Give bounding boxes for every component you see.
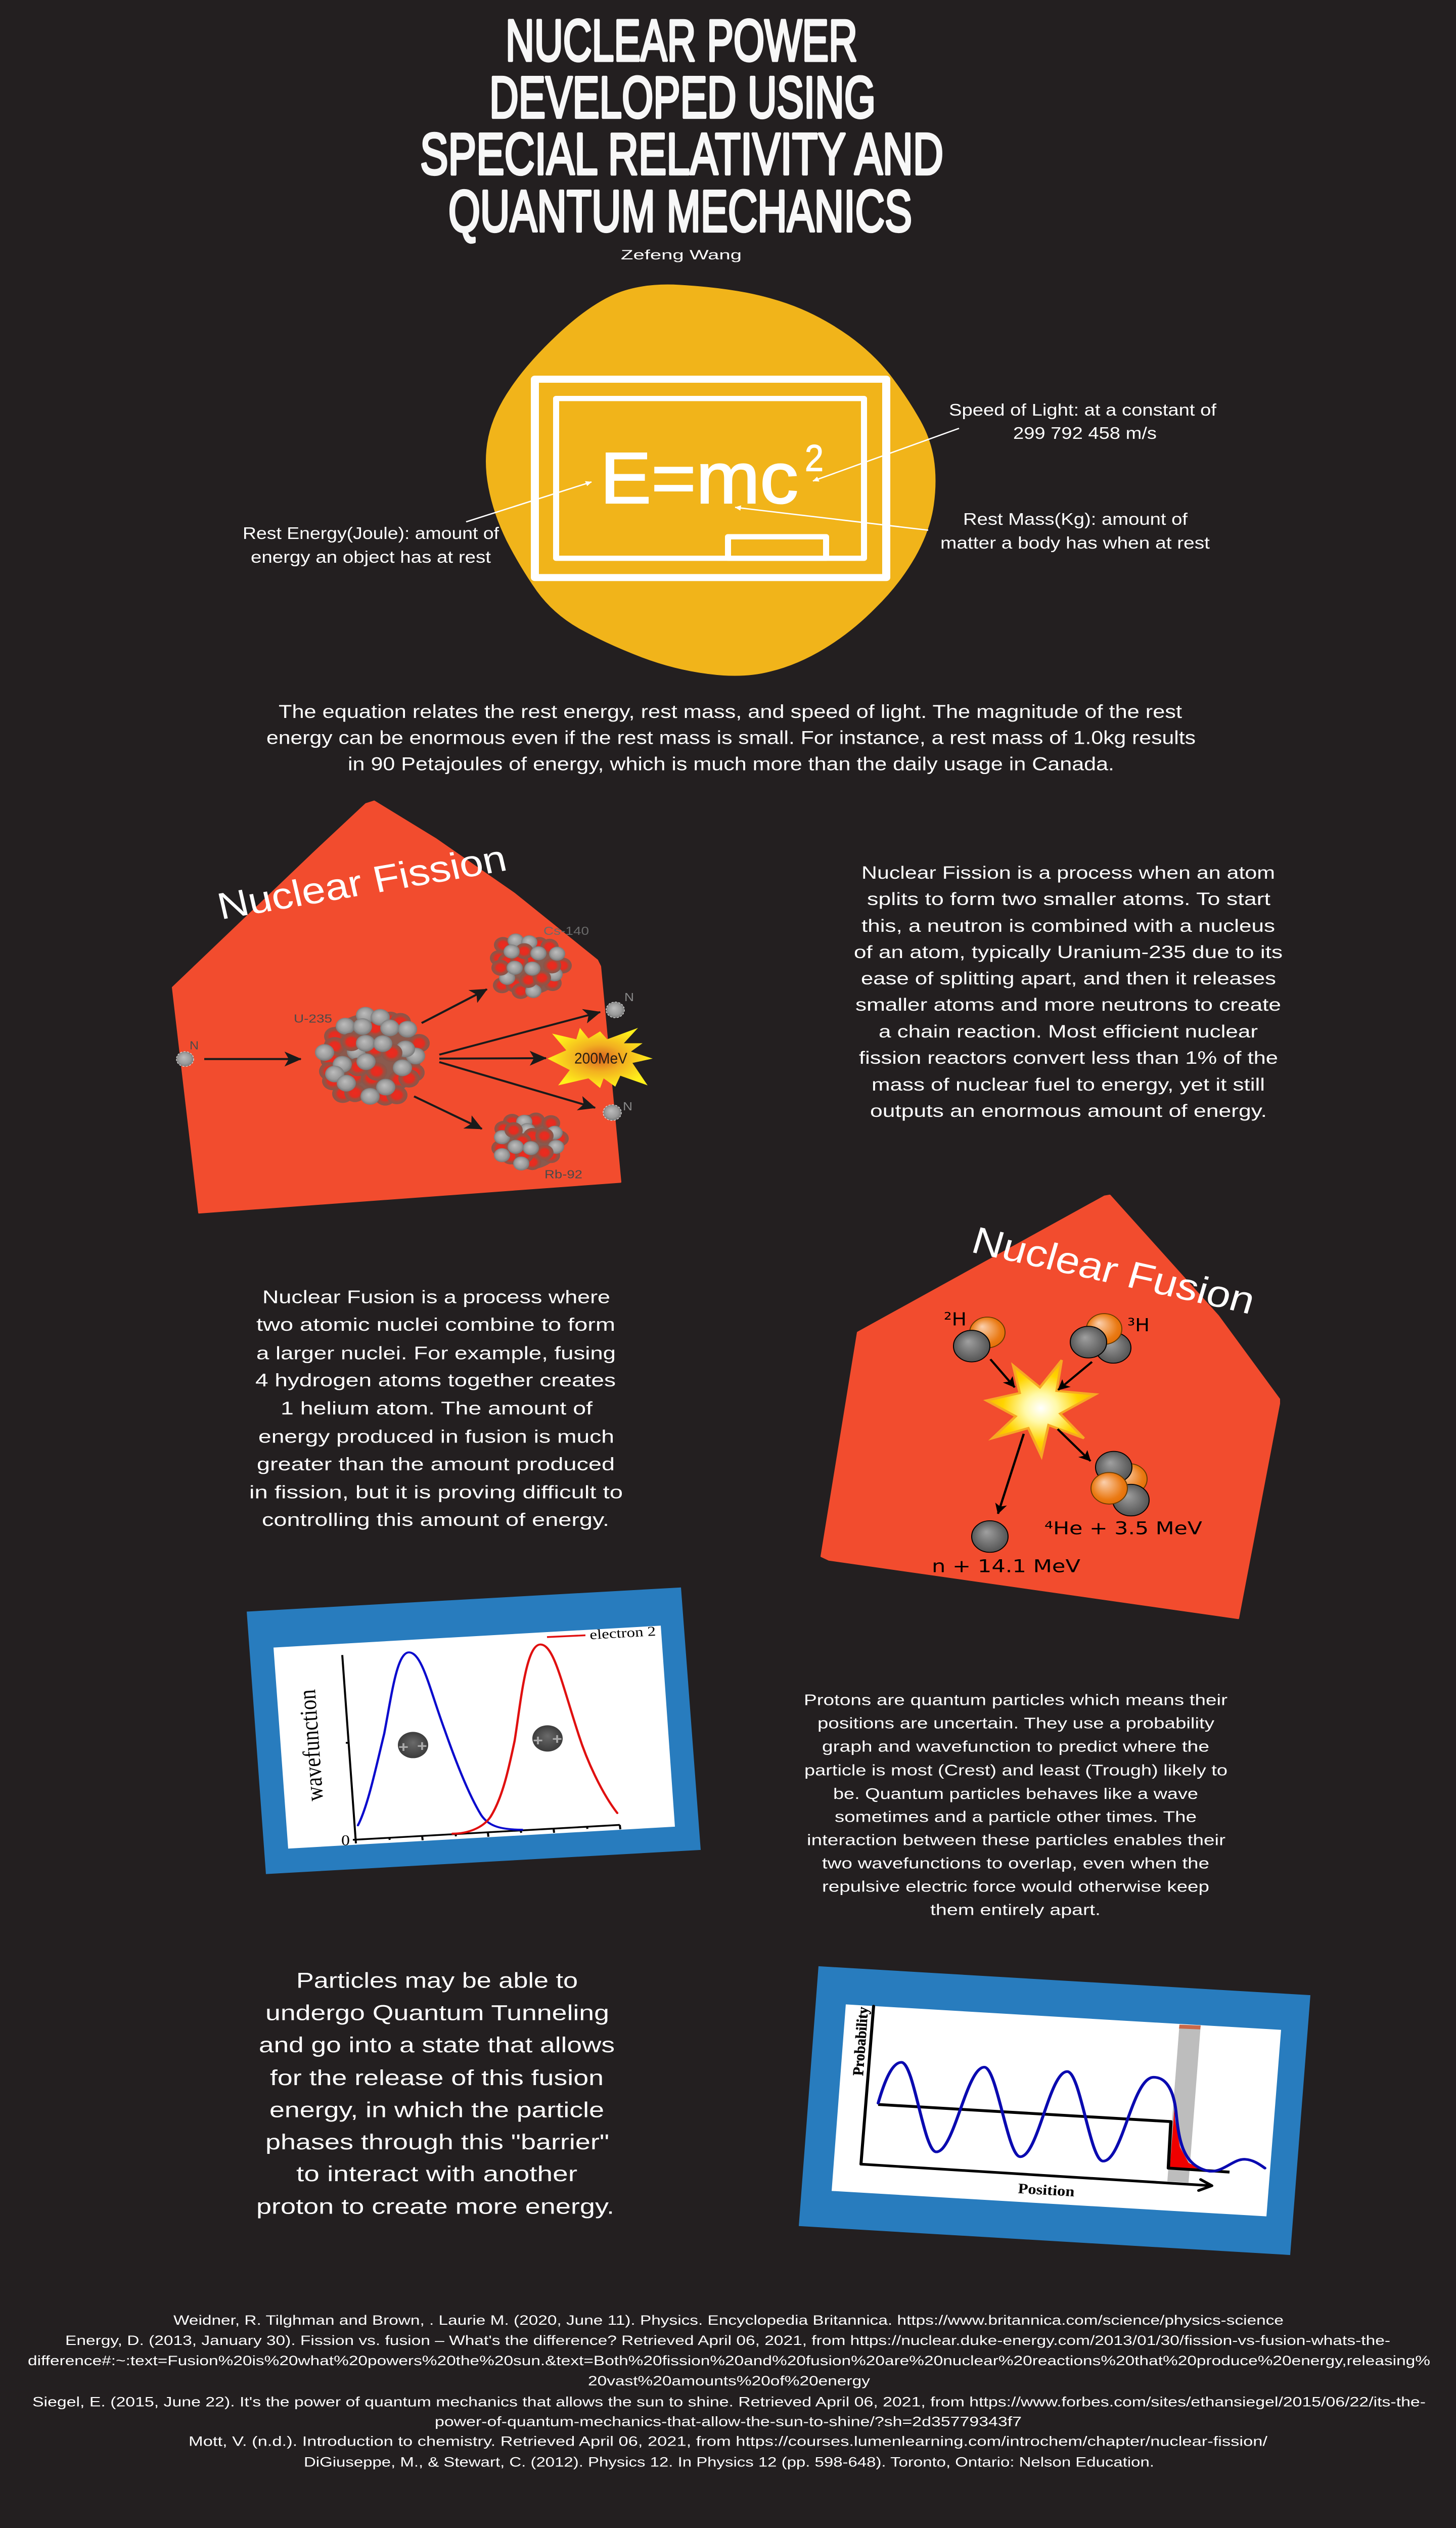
- neutrons: [176, 1002, 624, 1120]
- title: DEVELOPED USING: [489, 64, 876, 130]
- labels: particles: N: [623, 1100, 632, 1113]
- icon: proton 2: [532, 1725, 563, 1751]
- text block: quantum particles: graph and wavefunction to predict where the: [822, 1738, 1209, 1755]
- diagram: neutron: [972, 1521, 1008, 1552]
- title: QUANTUM MECHANICS: [448, 178, 912, 244]
- text block: nuclear fusion: greater than the amount produced: [257, 1454, 615, 1474]
- text block: nuclear fission: of an atom, typically Uranium-235 due to its: [854, 942, 1283, 962]
- red pentagon background: [822, 1196, 1279, 1618]
- axis label: wavefunction: wavefunction: [293, 1689, 329, 1802]
- text block: equation explanation: The equation relates the rest energy, rest mass, and speed of light. The magnitude of the rest: [279, 701, 1182, 722]
- text block: nuclear fission: [854, 863, 1283, 1121]
- red pentagon background: [173, 801, 620, 1212]
- label: speed of light: [949, 400, 1216, 442]
- text block: quantum particles: two wavefunctions to overlap, even when the: [822, 1855, 1209, 1872]
- axis label: probability: Probability: [850, 2006, 872, 2076]
- label: rest energy: Rest Energy(Joule): amount of: [243, 524, 499, 543]
- barrier: [1167, 2024, 1201, 2183]
- references: Energy, D. (2013, January 30). Fission vs. fusion – What's the difference? Retrieved April 06, 2021, from https://nuclear.duke-energy.com/2013/01/30/fission-vs-fusion-whats-the-: [65, 2333, 1390, 2349]
- label: speed of light: Speed of Light: at a constant of: [949, 400, 1216, 419]
- title: SPECIAL RELATIVITY AND: [420, 121, 943, 187]
- labels: particles: Cs-140: [543, 925, 589, 938]
- arrows: fusion reaction: [990, 1359, 1092, 1514]
- diagram: Cs-140 nucleus: [490, 933, 572, 999]
- text block: quantum particles: particle is most (Crest) and least (Trough) likely to: [804, 1761, 1227, 1779]
- labels: particles: N: [190, 1039, 199, 1052]
- icon: proton 1: +: [417, 1738, 427, 1754]
- text block: nuclear fusion: a larger nuclei. For example, fusing: [256, 1343, 616, 1364]
- icon: energy burst 200MeV: 200MeV: [574, 1049, 627, 1067]
- text block: quantum particles: sometimes and a particle other times. The: [835, 1808, 1197, 1825]
- text block: nuclear fission: outputs an enormous amount of energy.: [870, 1101, 1267, 1121]
- references: DiGiuseppe, M., & Stewart, C. (2012). Physics 12. In Physics 12 (pp. 598-648). Toronto, Ontario: Nelson Education.: [304, 2455, 1154, 2470]
- text block: nuclear fusion: in fission, but it is proving difficult to: [249, 1482, 623, 1503]
- diagram: energy star: [986, 1360, 1096, 1456]
- text block: quantum tunneling: Particles may be able to: [296, 1968, 578, 1993]
- references: difference#:~:text=Fusion%20is%20what%20powers%20the%20sun.&text=Both%20fission%20and%20fusion%20are%20nuclear%20reactions%20that%20produce%20energy,releasing%: [28, 2354, 1430, 2368]
- labels: fusion particles: ³H: [1127, 1315, 1150, 1336]
- label: rest mass: [940, 510, 1210, 552]
- arrow: speed of light: [813, 428, 959, 481]
- labels: particles: N: [624, 991, 634, 1004]
- references: Siegel, E. (2015, June 22). It's the power of quantum mechanics that allows the sun to shine. Retrieved April 06, 2021, from https://www.forbes.com/sites/ethansiegel/2015/06/22/its-the-: [32, 2395, 1426, 2410]
- legend: electron 2: [547, 1624, 656, 1643]
- references: power-of-quantum-mechanics-that-allow-the-sun-to-shine/?sh=2d35779343f7: [435, 2414, 1022, 2429]
- legend: electron 2: electron 2: [589, 1624, 656, 1643]
- text block: nuclear fusion: two atomic nuclei combine to form: [256, 1314, 615, 1335]
- text block: quantum particles: them entirely apart.: [930, 1901, 1101, 1918]
- blue frame: [799, 1966, 1310, 2255]
- diagram: Rb-92 nucleus: [491, 1113, 569, 1170]
- text block: quantum tunneling: and go into a state that allows: [259, 2033, 615, 2057]
- icon: chalkboard: [535, 379, 886, 577]
- labels: fusion particles: [932, 1309, 1202, 1576]
- panel: nuclear fission: [173, 801, 653, 1212]
- panel: wavefunction chart: [247, 1588, 701, 1874]
- text block: quantum particles: repulsive electric force would otherwise keep: [822, 1878, 1209, 1895]
- text block: nuclear fission: ease of splitting apart, and then it releases: [861, 969, 1276, 988]
- blue frame: [247, 1588, 701, 1874]
- text block: nuclear fusion: 1 helium atom. The amount of: [281, 1398, 593, 1419]
- panel: tunneling chart: [799, 1966, 1310, 2255]
- diagram: tritium: [1070, 1314, 1131, 1363]
- text block: equation explanation: [266, 701, 1196, 775]
- text block: quantum tunneling: [256, 1968, 615, 2219]
- panel: nuclear fusion: [822, 1196, 1279, 1618]
- text block: quantum particles: be. Quantum particles behaves like a wave: [833, 1785, 1198, 1802]
- diagram: helium: [1091, 1452, 1149, 1516]
- label: rest energy: energy an object has at rest: [251, 548, 491, 566]
- label: speed of light: 299 792 458 m/s: [1013, 424, 1157, 442]
- text block: equation explanation: energy can be enormous even if the rest mass is small. For instance, a rest mass of 1.0kg results: [266, 727, 1196, 748]
- text block: quantum particles: interaction between these particles enables their: [807, 1831, 1225, 1848]
- yellow blob: [486, 285, 935, 676]
- icon: proton 1: +: [398, 1738, 408, 1755]
- labels: particles: Rb-92: [544, 1168, 582, 1181]
- text block: quantum tunneling: to interact with another: [296, 2161, 577, 2186]
- diagram: deuterium: [953, 1317, 1005, 1362]
- text block: nuclear fission: a chain reaction. Most efficient nuclear: [879, 1022, 1258, 1042]
- icon: proton 2: +: [533, 1732, 543, 1749]
- text block: quantum tunneling: energy, in which the particle: [269, 2098, 604, 2122]
- icon: proton 2: +: [552, 1731, 562, 1747]
- curve: probability wave: [878, 2062, 1265, 2171]
- tunneling red area: [1170, 2108, 1202, 2170]
- arrow: rest mass: [735, 507, 928, 530]
- text block: nuclear fission: Nuclear Fission is a process when an atom: [861, 863, 1275, 883]
- text block: nuclear fission: mass of nuclear fuel to energy, yet it still: [872, 1075, 1265, 1095]
- equation E=mc2: E=mc: [600, 437, 798, 518]
- curve: electron 2 wavefunction: [452, 1645, 617, 1834]
- labels: fusion particles: ⁴He + 3.5 MeV: [1044, 1518, 1202, 1539]
- text block: nuclear fission: splits to form two smaller atoms. To start: [867, 889, 1270, 909]
- arrows: reaction paths: [204, 989, 600, 1129]
- title: [420, 7, 943, 244]
- references: Mott, V. (n.d.). Introduction to chemistry. Retrieved April 06, 2021, from https://courses.lumenlearning.com/introchem/chapter/nuclear-fission/: [189, 2434, 1268, 2449]
- potential barrier line: [878, 2104, 1230, 2172]
- references: Weidner, R. Tilghman and Brown, . Laurie M. (2020, June 11). Physics. Encyclopedia Britannica. https://www.britannica.com/science/physics-science: [173, 2313, 1284, 2328]
- text block: nuclear fusion: 4 hydrogen atoms together creates: [255, 1370, 616, 1391]
- diagram: U-235 nucleus: [315, 1007, 430, 1106]
- labels: fusion particles: ²H: [944, 1309, 967, 1330]
- labels: particles: U-235: [294, 1012, 332, 1025]
- text block: nuclear fission: smaller atoms and more neutrons to create: [855, 995, 1281, 1015]
- label: rest mass: matter a body has when at rest: [940, 533, 1210, 552]
- icon: energy burst 200MeV: [548, 1028, 653, 1088]
- label: rest mass: Rest Mass(Kg): amount of: [963, 510, 1188, 529]
- text block: quantum tunneling: undergo Quantum Tunneling: [265, 2001, 609, 2025]
- text block: nuclear fission: this, a neutron is combined with a nucleus: [861, 916, 1275, 936]
- icon: proton 1: [398, 1732, 428, 1758]
- text block: quantum tunneling: for the release of this fusion: [270, 2065, 604, 2090]
- text block: nuclear fusion: Nuclear Fusion is a process where: [262, 1287, 610, 1307]
- text block: quantum particles: Protons are quantum particles which means their: [804, 1691, 1227, 1708]
- text block: nuclear fission: fission reactors convert less than 1% of the: [859, 1048, 1278, 1068]
- text block: equation explanation: in 90 Petajoules of energy, which is much more than the daily usage in Canada.: [348, 753, 1114, 775]
- text block: nuclear fusion: controlling this amount of energy.: [262, 1510, 609, 1530]
- curve: electron 1 wavefunction: [358, 1652, 522, 1830]
- text block: quantum tunneling: proton to create more energy.: [256, 2194, 614, 2219]
- axis label: position: Position: [1018, 2180, 1075, 2200]
- text block: nuclear fusion: [249, 1287, 623, 1530]
- references: 20vast%20amounts%20of%20energy: [588, 2374, 871, 2388]
- text block: nuclear fusion: energy produced in fusion is much: [258, 1426, 614, 1447]
- chart axes: [861, 2006, 1212, 2190]
- heading: nuclear fission: Nuclear Fission: [213, 837, 510, 927]
- arrow: rest energy: [466, 482, 592, 522]
- title: NUCLEAR POWER: [506, 7, 857, 73]
- white chart area: [274, 1626, 675, 1848]
- label: rest energy: [243, 524, 499, 566]
- text block: quantum particles: positions are uncertain. They use a probability: [817, 1714, 1215, 1732]
- text block: quantum particles: [804, 1691, 1227, 1918]
- equation E=mc2: 2: [805, 437, 824, 479]
- axis label: zero: 0: [341, 1832, 350, 1848]
- heading: nuclear fusion: Nuclear Fusion: [967, 1219, 1260, 1323]
- white chart area: [832, 2004, 1281, 2217]
- chart axes: [342, 1655, 620, 1843]
- labels: fusion particles: n + 14.1 MeV: [932, 1556, 1080, 1576]
- author: Zefeng Wang: [621, 248, 742, 263]
- labels: particles: [190, 925, 634, 1181]
- references: [28, 2313, 1430, 2470]
- panel: equation: [243, 285, 1216, 676]
- text block: quantum tunneling: phases through this "barrier": [265, 2130, 609, 2154]
